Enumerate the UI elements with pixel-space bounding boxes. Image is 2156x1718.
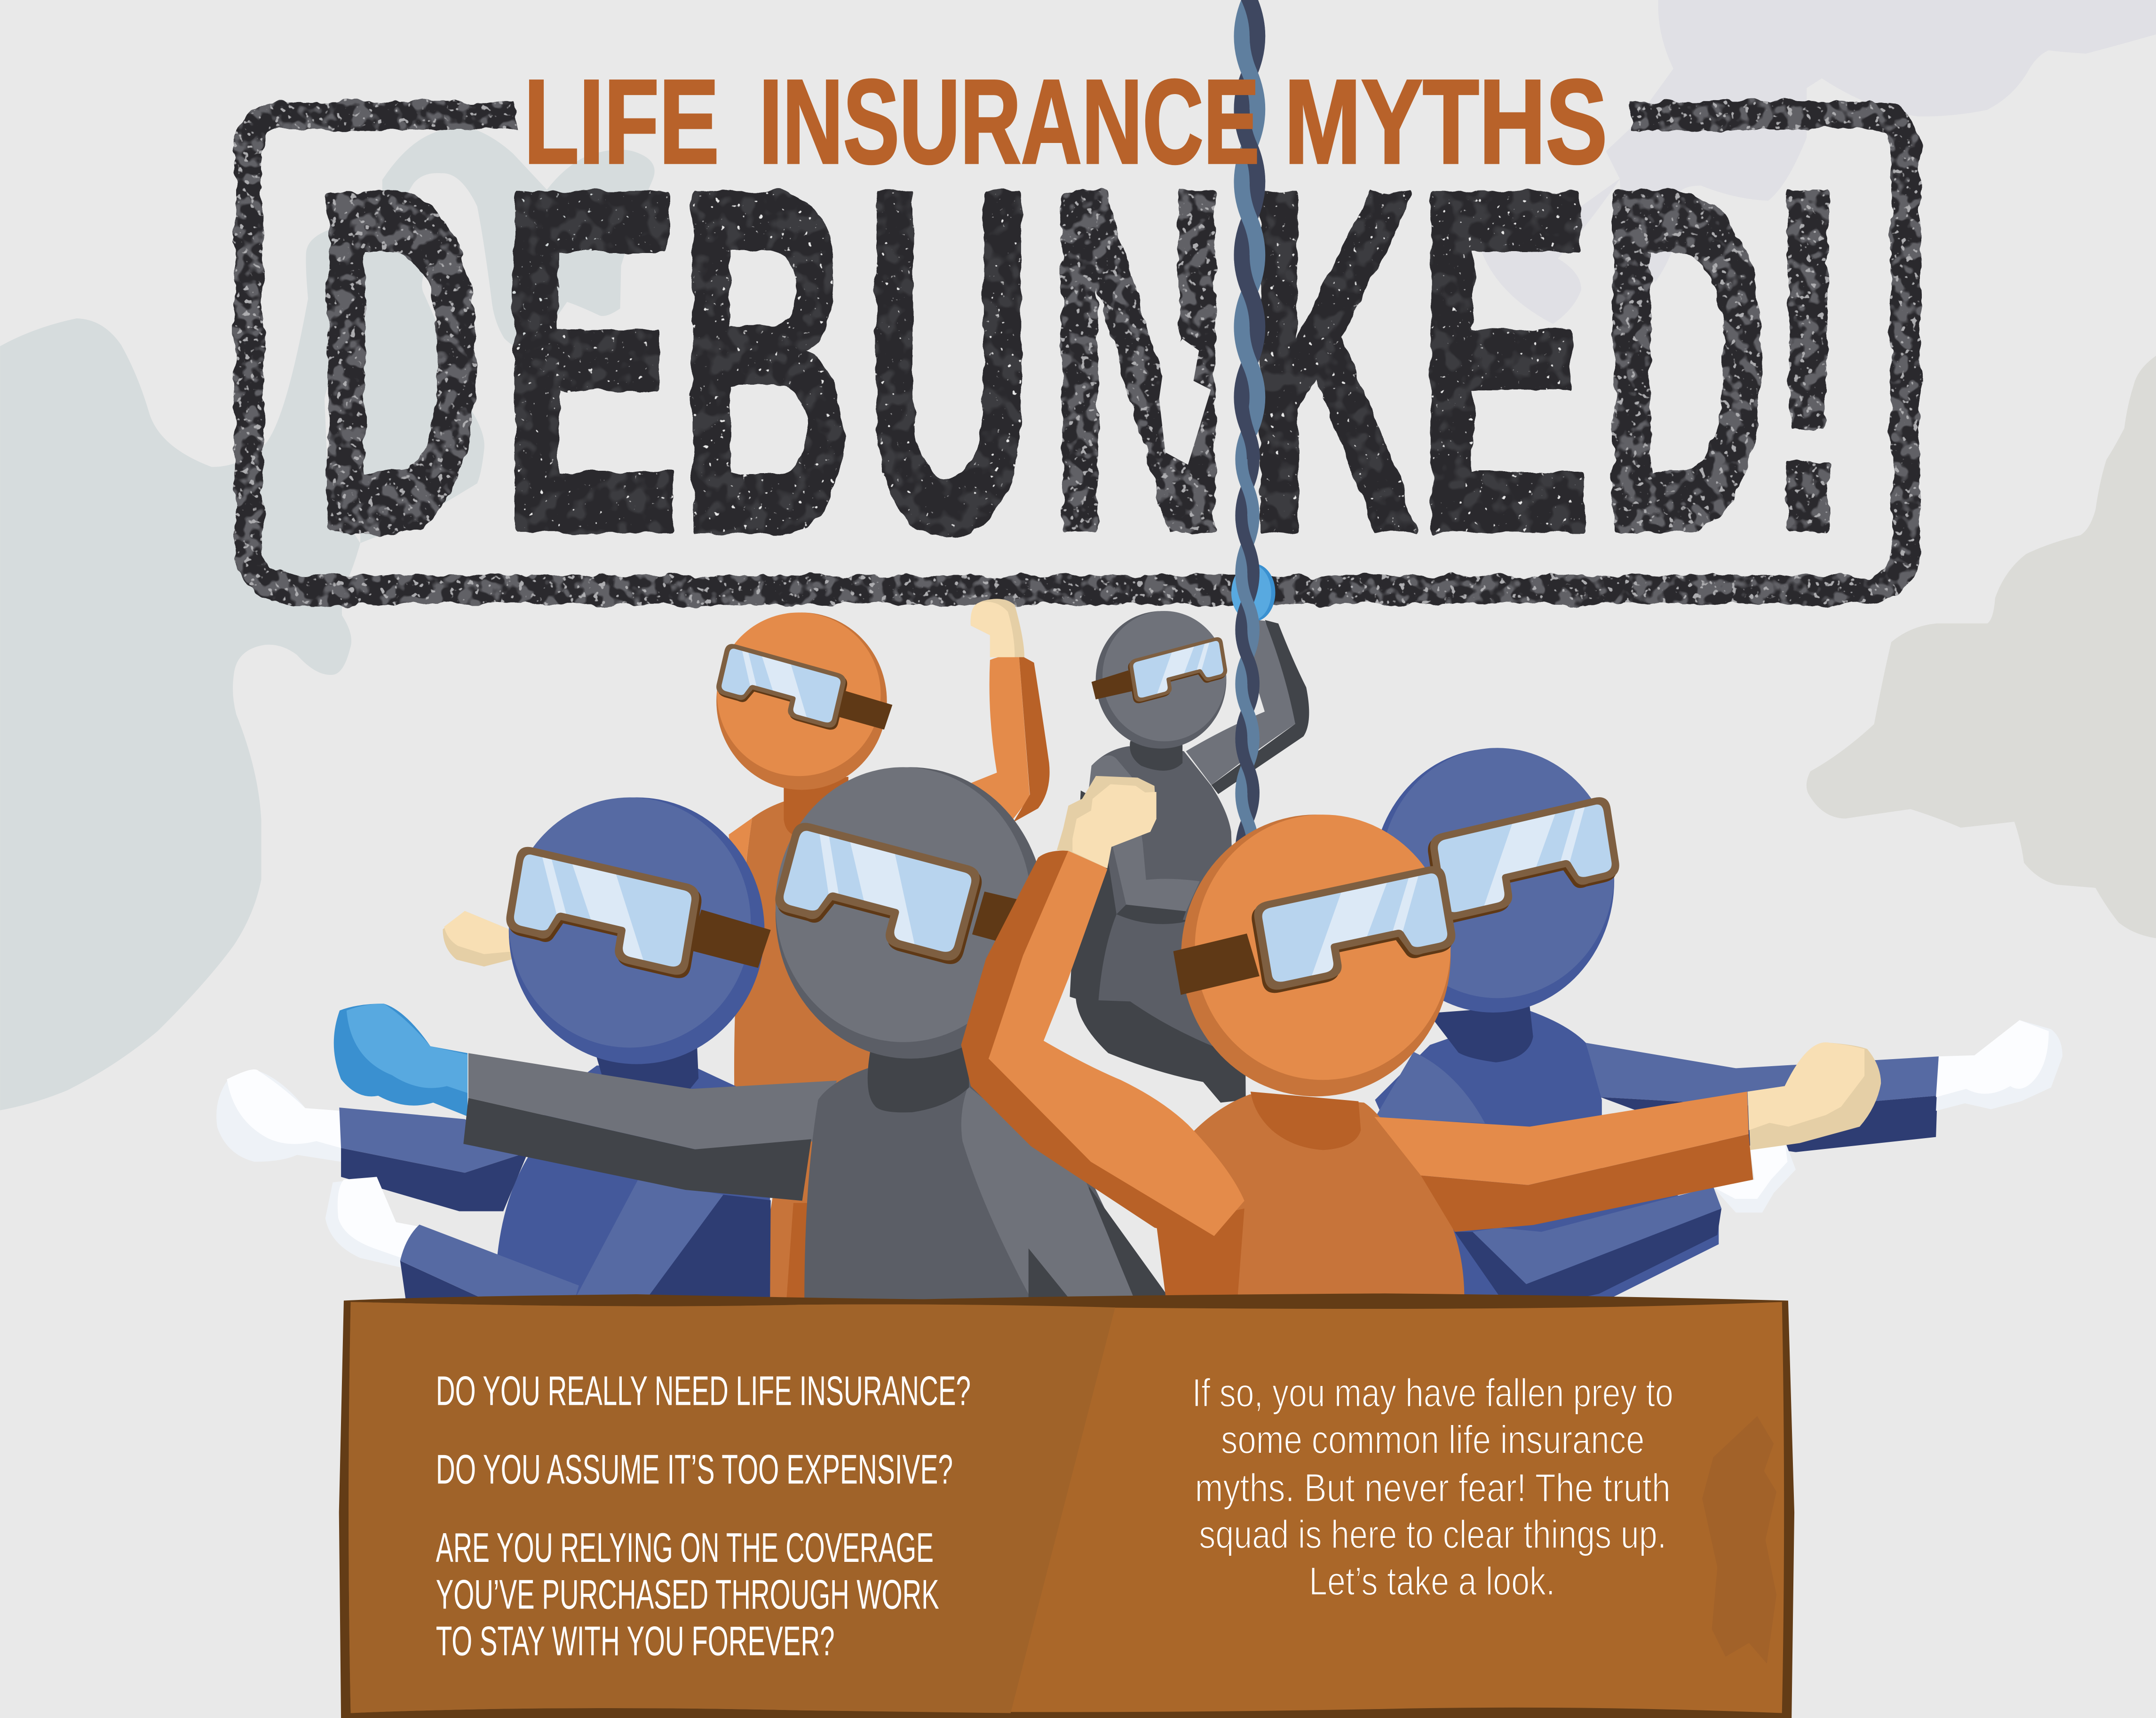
text: intro: Let’s take a look. bbox=[1309, 1559, 1555, 1603]
figure: grey person at back holding rope bbox=[1070, 611, 1309, 1103]
title: Life Insurance Myths: LIFE bbox=[524, 55, 719, 188]
figure: orange person at back bbox=[713, 599, 1050, 1299]
figure: orange person front bbox=[961, 776, 1881, 1299]
text: questions: DO YOU ASSUME IT’S TOO EXPENSIVE? bbox=[436, 1446, 953, 1492]
stamped letters, worn: N bbox=[1046, 89, 1230, 633]
figure: blue person back right bbox=[1372, 748, 2062, 1299]
icon: fist right bbox=[1748, 1042, 1881, 1150]
rope bbox=[1241, 0, 1257, 880]
figure: blue person left bbox=[216, 798, 771, 1299]
board stain bbox=[1702, 1416, 1776, 1663]
text: questions: TO STAY WITH YOU FOREVER? bbox=[436, 1618, 835, 1664]
worn gap in letter N bbox=[1159, 339, 1211, 465]
icon: white glove upper bbox=[216, 1069, 341, 1162]
stamped letters, worn bbox=[314, 89, 1854, 633]
text: intro bbox=[1192, 1370, 1673, 1603]
text: intro: squad is here to clear things up. bbox=[1199, 1512, 1666, 1557]
text: questions: YOU’VE PURCHASED THROUGH WORK bbox=[436, 1571, 939, 1617]
text: questions: DO YOU REALLY NEED LIFE INSURANCE? bbox=[436, 1368, 971, 1414]
stamped letters, worn: ! bbox=[1763, 89, 1854, 633]
stamped letters, dark: K bbox=[1246, 89, 1419, 633]
text: questions bbox=[436, 1368, 971, 1664]
icon: fist raised bbox=[1057, 776, 1157, 868]
icon: blue glove on rope bbox=[1231, 564, 1275, 621]
title: Life Insurance Myths: INSURANCE bbox=[759, 55, 1260, 188]
title: Life Insurance Myths: MYTHS bbox=[1284, 55, 1607, 188]
stamped letters, worn: D bbox=[1599, 89, 1769, 633]
title: Life Insurance Myths bbox=[524, 55, 1607, 188]
panel: wooden board bbox=[339, 1293, 1794, 1718]
figure: grey person front bbox=[463, 767, 1170, 1299]
background smoke clouds bbox=[0, 0, 2156, 1110]
icon: white glove lower bbox=[325, 1177, 418, 1267]
text: intro: some common life insurance bbox=[1221, 1417, 1644, 1462]
stamped letters, dark: E bbox=[1415, 89, 1593, 633]
stamped letters, dark: U bbox=[864, 89, 1034, 633]
text: intro: myths. But never fear! The truth bbox=[1195, 1465, 1671, 1510]
icon: blue glove bbox=[334, 1004, 468, 1116]
stamped letters, worn: D bbox=[314, 89, 484, 633]
stamped letters, dark bbox=[498, 89, 1593, 633]
text: questions: ARE YOU RELYING ON THE COVERAGE bbox=[436, 1525, 934, 1571]
title: DEBUNKED! bbox=[314, 89, 1854, 633]
stamped letters, dark: E bbox=[498, 89, 682, 633]
text: intro: If so, you may have fallen prey to bbox=[1192, 1370, 1673, 1415]
stamp frame bbox=[249, 116, 1906, 590]
stamped letters, dark: B bbox=[678, 89, 853, 633]
